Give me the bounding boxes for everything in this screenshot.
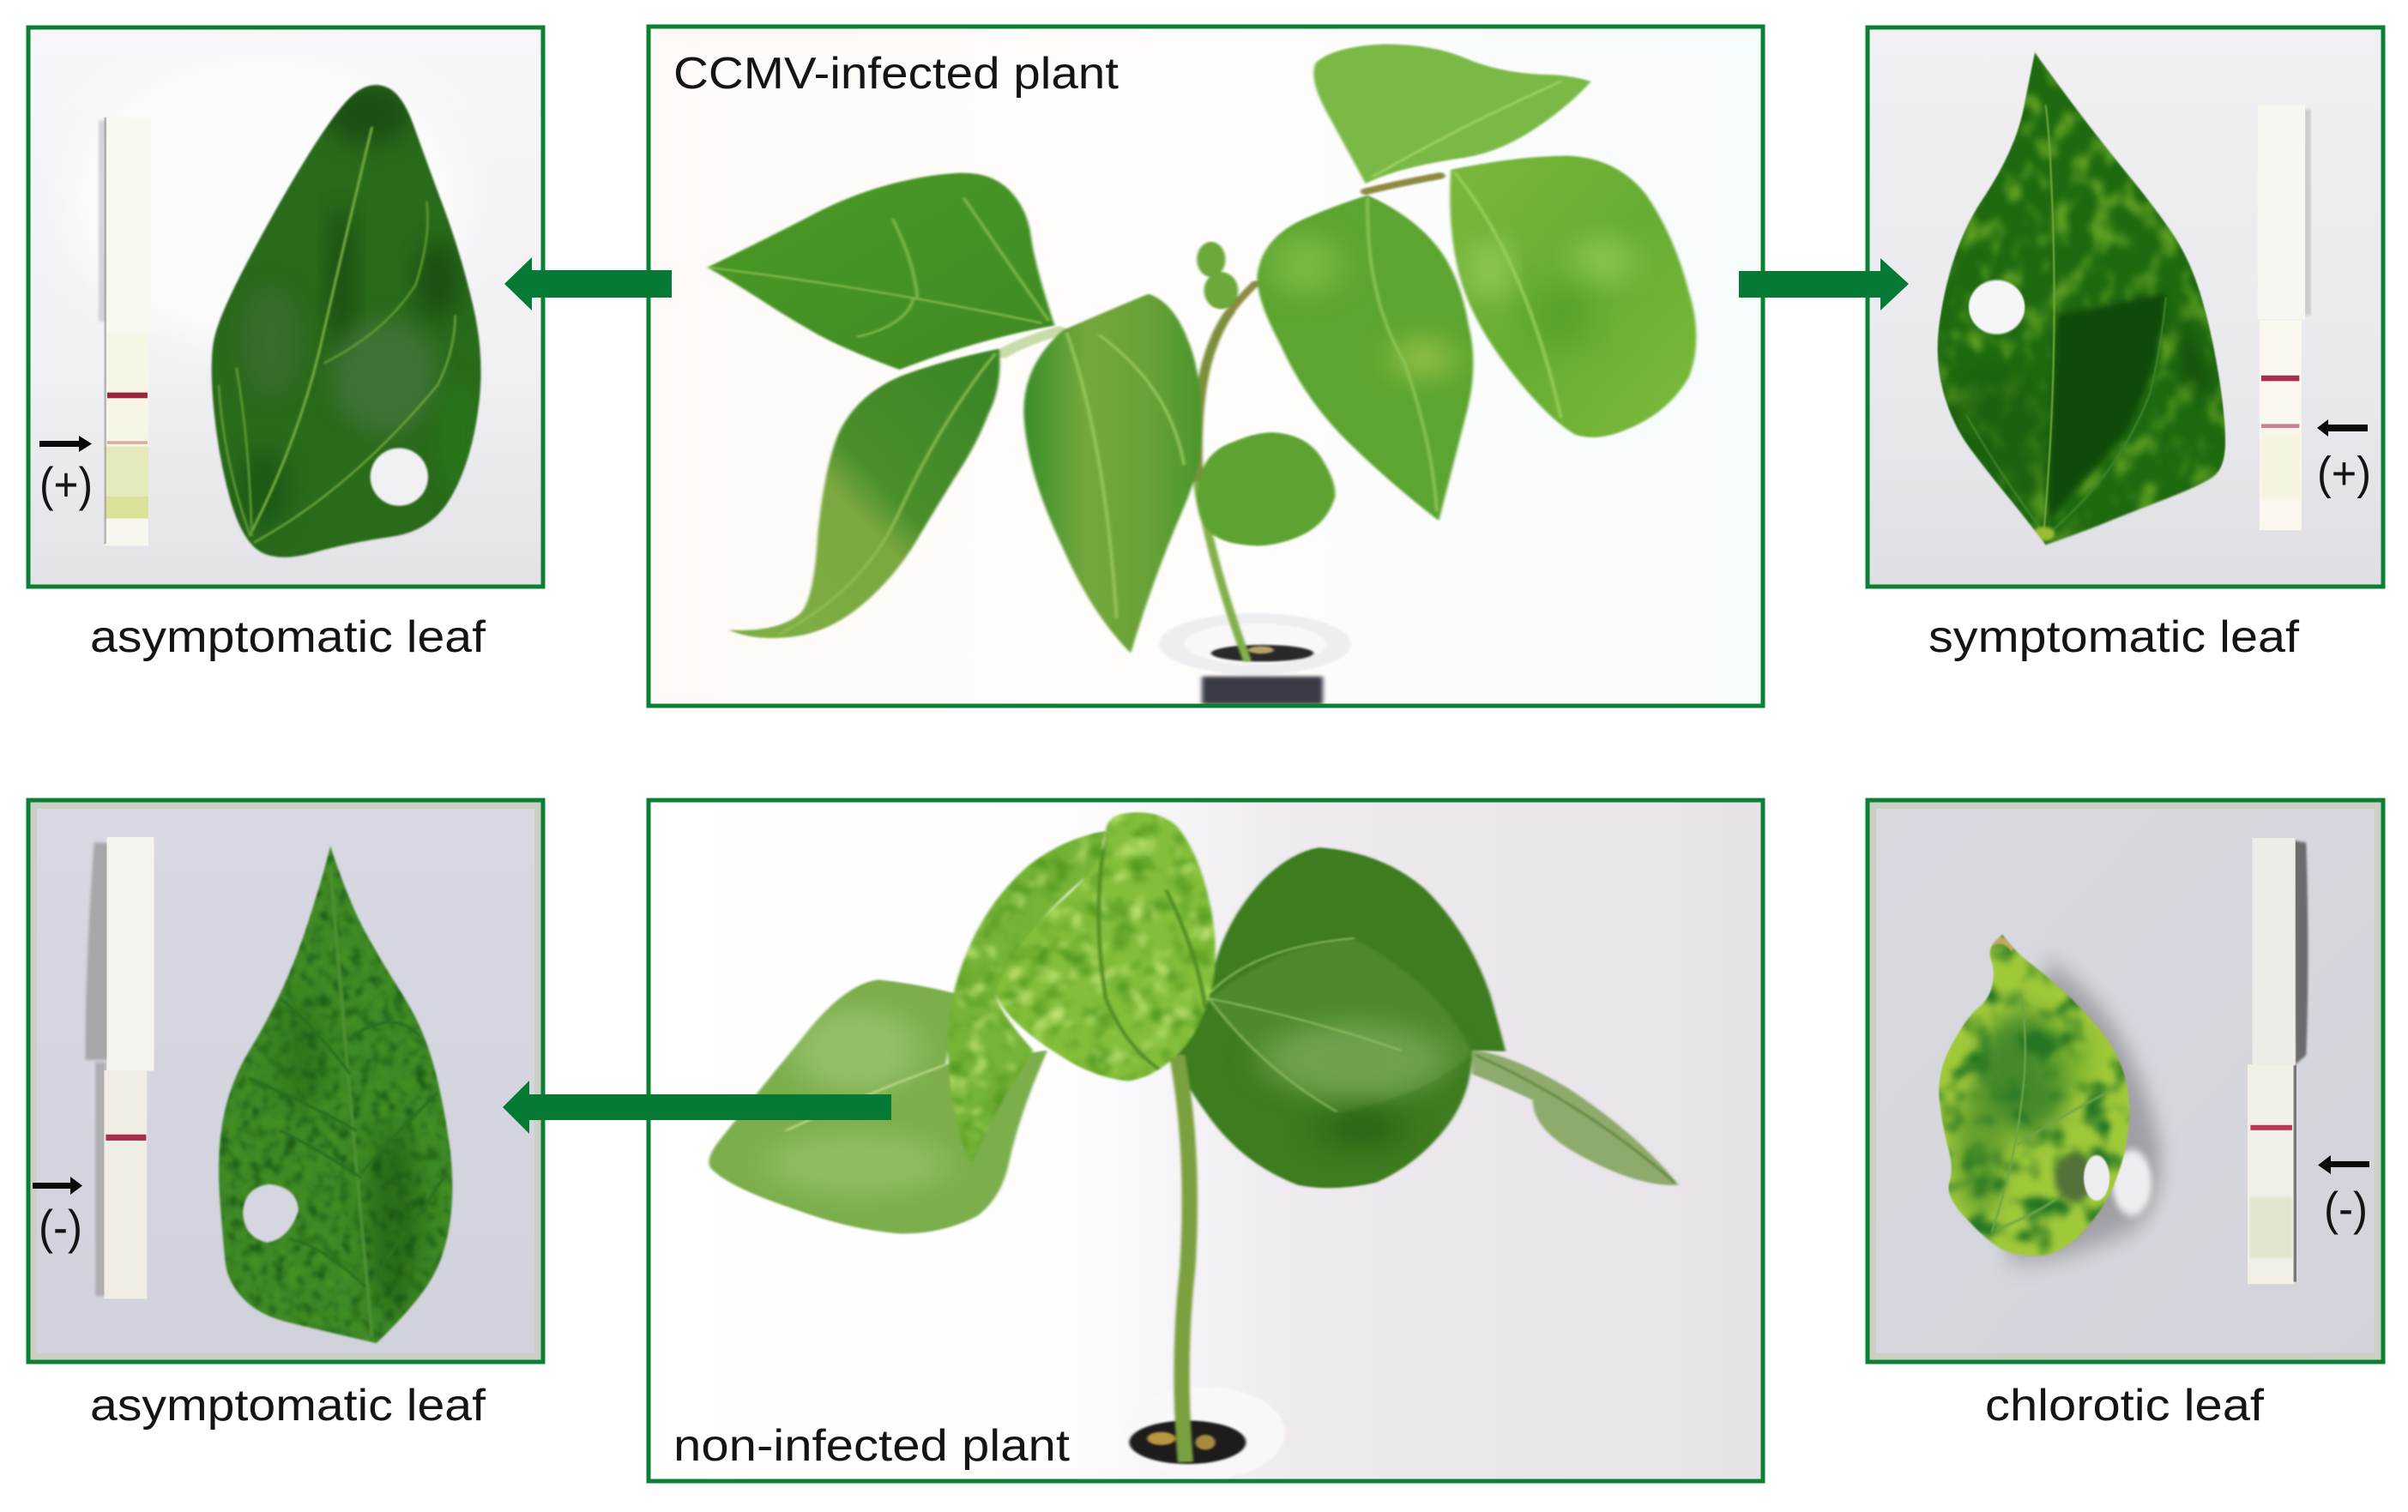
panel title: non-infected plant (673, 1421, 1071, 1471)
leaf: right (1450, 156, 1696, 437)
result label: negative: (-) (39, 1200, 82, 1254)
plant: infected bean plant (708, 44, 1696, 704)
result label: negative: (-) (2324, 1182, 2368, 1235)
test strip: negative result (2248, 838, 2308, 1284)
leaf: crinkled back (942, 824, 1113, 1173)
caption: asymptomatic leaf, top: asymptomatic leaf (90, 612, 486, 662)
leaf: mottled symptomatic leaf (1931, 48, 2232, 551)
panel: chlorotic leaf with test strip (1868, 800, 2383, 1362)
panel: asymptomatic infected leaf with test strip (28, 27, 543, 587)
arrow: points to absent test line (33, 1177, 82, 1195)
test strip: positive result (99, 117, 151, 545)
arrow: points to positive test line (39, 436, 92, 452)
panel title: CCMV-infected plant (673, 49, 1120, 99)
panel border (649, 27, 1763, 706)
leaf: yellow-green chlorotic leaf with shadow (1934, 932, 2161, 1261)
panel border (1868, 800, 2383, 1362)
stems (1003, 176, 1440, 660)
plant: healthy bean plant (709, 810, 1679, 1479)
panel: asymptomatic non-infected leaf with test strip (28, 800, 543, 1362)
leaf: dark right (1177, 847, 1506, 1188)
result label: positive: (+) (2317, 448, 2371, 499)
caption: asymptomatic leaf, bottom: asymptomatic leaf (90, 1381, 486, 1431)
test strip: negative result (85, 837, 154, 1298)
arrow: non-infected plant to asymptomatic leaf (503, 1081, 891, 1134)
panel: non-infected plant photograph (649, 800, 1763, 1481)
leaf: small primary (1197, 432, 1335, 545)
result label: positive: (+) (39, 457, 93, 511)
leaf: lower left (729, 349, 999, 638)
stem (1177, 1055, 1190, 1462)
leaf: top (1313, 44, 1591, 184)
bud (1197, 242, 1238, 309)
panel: symptomatic infected leaf with test strip (1868, 27, 2383, 587)
arrow: points to positive test line (2317, 419, 2368, 437)
test strip: positive result (2258, 105, 2311, 530)
panel border (1868, 27, 2383, 587)
pot (1126, 1387, 1285, 1479)
panel: CCMV-infected plant photograph (649, 27, 1763, 706)
pot (1159, 613, 1351, 704)
leaf: pale underside left (709, 979, 1047, 1233)
leaf: centre (1023, 294, 1202, 654)
leaf: upper left (708, 173, 1054, 370)
arrow: infected plant to symptomatic leaf (1739, 258, 1909, 310)
caption: chlorotic leaf: chlorotic leaf (1985, 1381, 2265, 1431)
panel border (28, 27, 543, 587)
panel border (649, 800, 1763, 1481)
arrow: points to absent test line (2318, 1155, 2369, 1174)
leaf: centre right (1257, 196, 1473, 521)
leaf: crinkled green healthy leaf (210, 843, 460, 1348)
arrow: infected plant to asymptomatic leaf (504, 257, 672, 310)
leaf: crinkled front (985, 810, 1227, 1088)
panel border (28, 800, 543, 1362)
leaf: dark green asymptomatic leaf (206, 79, 486, 564)
caption: symptomatic leaf: symptomatic leaf (1928, 612, 2300, 662)
leaf: pale narrow right (1472, 1051, 1679, 1185)
